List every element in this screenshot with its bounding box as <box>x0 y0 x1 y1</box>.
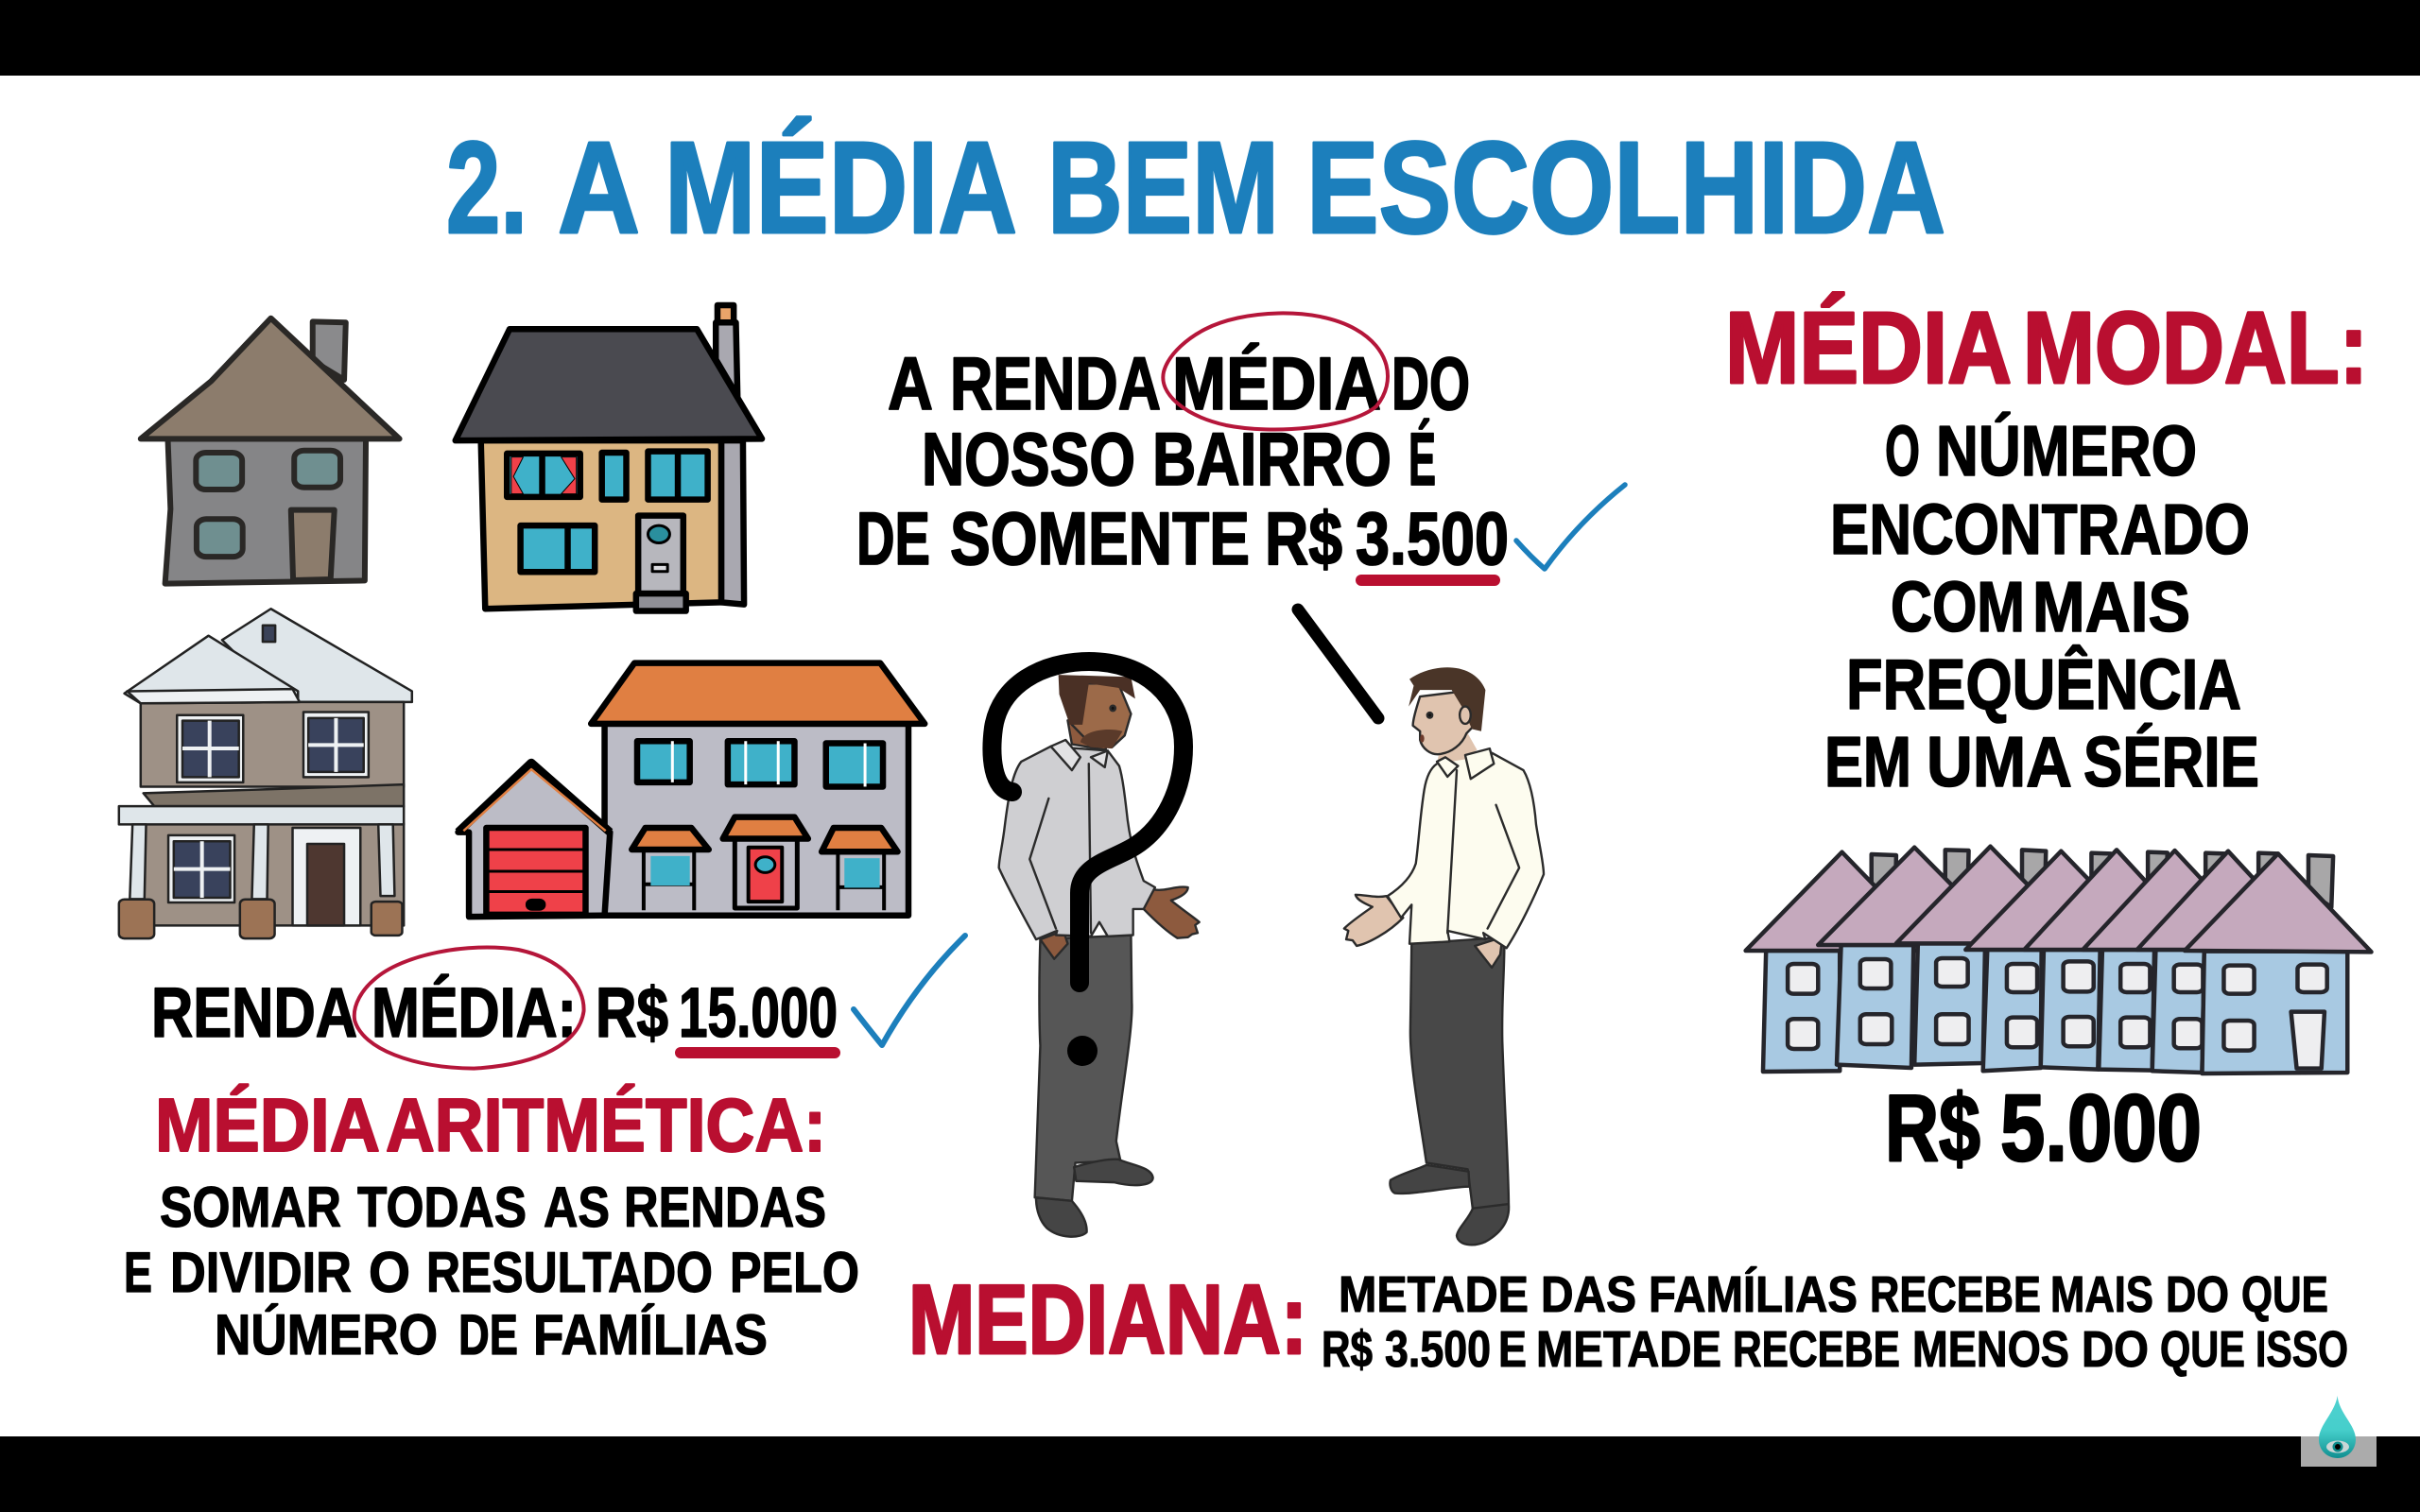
text: renda media <box>151 973 838 1052</box>
figure: man in cream shirt <box>1344 667 1544 1245</box>
text: mediana description: METADE <box>1536 1321 1721 1378</box>
text: mediana description: 3.500 <box>1385 1321 1491 1378</box>
text: mediana description: RECEBE <box>1733 1321 1900 1378</box>
text: speech renda media do bairro: A <box>888 341 933 425</box>
heading: media modal: MÉDIA <box>1725 290 2012 404</box>
text: renda media: RENDA <box>151 973 357 1052</box>
title: MÉDIA <box>665 115 1017 261</box>
text: mediana description: QUE <box>2160 1321 2245 1378</box>
text: media modal description: UMA <box>1927 722 2072 801</box>
icon: large house with garage <box>458 663 925 917</box>
text: media modal description: NÚMERO <box>1936 411 2197 490</box>
red circle around media in speech <box>1163 313 1388 429</box>
text: media aritmetica description <box>124 1176 859 1366</box>
text: speech renda media do bairro: 3.500 <box>1356 496 1509 580</box>
check mark 15.000 <box>854 936 965 1045</box>
text: media aritmetica description: DE <box>458 1303 518 1366</box>
bottom black bar <box>0 1436 2420 1512</box>
text: media modal description: ENCONTRADO <box>1830 490 2250 569</box>
icon: gray house <box>141 318 400 584</box>
text: media aritmetica description: RESULTADO <box>426 1241 713 1304</box>
text: mediana description: E <box>1498 1321 1527 1378</box>
text: speech renda media do bairro <box>856 341 1509 580</box>
text: media aritmetica description: SOMAR <box>160 1176 341 1239</box>
heading: media aritmetica: ARITMÉTICA: <box>386 1083 826 1167</box>
text: renda media: R$ <box>596 973 668 1052</box>
text: mediana description: MENOS <box>1912 1321 2069 1378</box>
heading: media aritmetica <box>155 1083 826 1167</box>
title: ESCOLHIDA <box>1306 115 1945 261</box>
text: media aritmetica description: FAMÍLIAS <box>533 1303 768 1366</box>
text: speech renda media do bairro: É <box>1409 417 1436 501</box>
watermark: water drop with eye <box>2301 1396 2377 1467</box>
text: mediana description <box>1322 1266 2348 1378</box>
red circle around media <box>354 948 584 1069</box>
text: mediana description: R$ <box>1322 1321 1373 1378</box>
text: mediana description: FAMÍLIAS <box>1649 1266 1858 1323</box>
text: speech renda media do bairro: BAIRRO <box>1152 417 1392 501</box>
icon: two-storey house with porch <box>119 609 412 938</box>
text: media aritmetica description: TODAS <box>357 1176 527 1239</box>
text: media aritmetica description: E <box>124 1241 152 1304</box>
text: media modal description: FREQUÊNCIA <box>1846 644 2241 724</box>
text: renda media: 15.000 <box>679 973 838 1052</box>
text: mediana description: QUE <box>2241 1266 2328 1323</box>
text: media modal description <box>1824 411 2259 801</box>
text: renda media: MÉDIA: <box>372 973 577 1052</box>
title: 2. <box>446 115 527 261</box>
text: speech renda media do bairro: DO <box>1392 341 1470 425</box>
text: R$ 5.000: 5.000 <box>2000 1075 2202 1181</box>
text: mediana description: DO <box>2082 1321 2149 1378</box>
icon: row of identical houses <box>1746 847 2371 1074</box>
text: media aritmetica description: DIVIDIR <box>170 1241 352 1304</box>
text: speech renda media do bairro: R$ <box>1265 496 1342 580</box>
heading: mediana: MEDIANA: <box>908 1265 1307 1375</box>
text: mediana description: METADE <box>1339 1266 1529 1323</box>
figure: man with beard <box>999 675 1200 1237</box>
red underline 3.500 <box>1361 575 1495 586</box>
icon: beige house with dark roof <box>456 305 762 611</box>
text: speech renda media do bairro: NOSSO <box>922 417 1135 501</box>
text: mediana description: MAIS <box>2050 1266 2153 1323</box>
text: media modal description: COM <box>1891 567 2025 646</box>
heading: media modal <box>1725 290 2368 404</box>
text: media aritmetica description: NÚMERO <box>215 1303 438 1366</box>
heading: media aritmetica: MÉDIA <box>155 1083 380 1167</box>
text: speech renda media do bairro: SOMENTE <box>950 496 1250 580</box>
text: R$ 5.000: R$ <box>1885 1075 1980 1181</box>
title <box>446 115 1945 261</box>
question mark <box>992 662 1184 1066</box>
text: R$ 5.000 <box>1885 1075 2202 1181</box>
check mark 3.500 <box>1516 485 1625 569</box>
text: media aritmetica description: PELO <box>730 1241 859 1304</box>
text: mediana description: DAS <box>1541 1266 1636 1323</box>
text: mediana description: DO <box>2166 1266 2229 1323</box>
text: speech renda media do bairro: RENDA <box>950 341 1161 425</box>
red underline 15.000 <box>681 1047 835 1058</box>
text: media aritmetica description: AS <box>544 1176 610 1239</box>
title: A <box>558 115 640 261</box>
text: mediana description: RECEBE <box>1870 1266 2041 1323</box>
text: speech renda media do bairro: MÉDIA <box>1172 341 1381 425</box>
text: media modal description: MAIS <box>2032 567 2190 646</box>
text: speech renda media do bairro: DE <box>856 496 930 580</box>
heading: media modal: MODAL: <box>2023 290 2368 404</box>
text: mediana description: ISSO <box>2256 1321 2348 1378</box>
text: media aritmetica description: O <box>369 1241 410 1304</box>
top black bar <box>0 0 2420 76</box>
speech tail line <box>1298 610 1378 718</box>
text: media modal description: EM <box>1824 722 1911 801</box>
text: media modal description: SÉRIE <box>2083 722 2259 801</box>
text: media modal description: O <box>1885 411 1920 490</box>
title: BEM <box>1047 115 1279 261</box>
text: media aritmetica description: RENDAS <box>624 1176 826 1239</box>
